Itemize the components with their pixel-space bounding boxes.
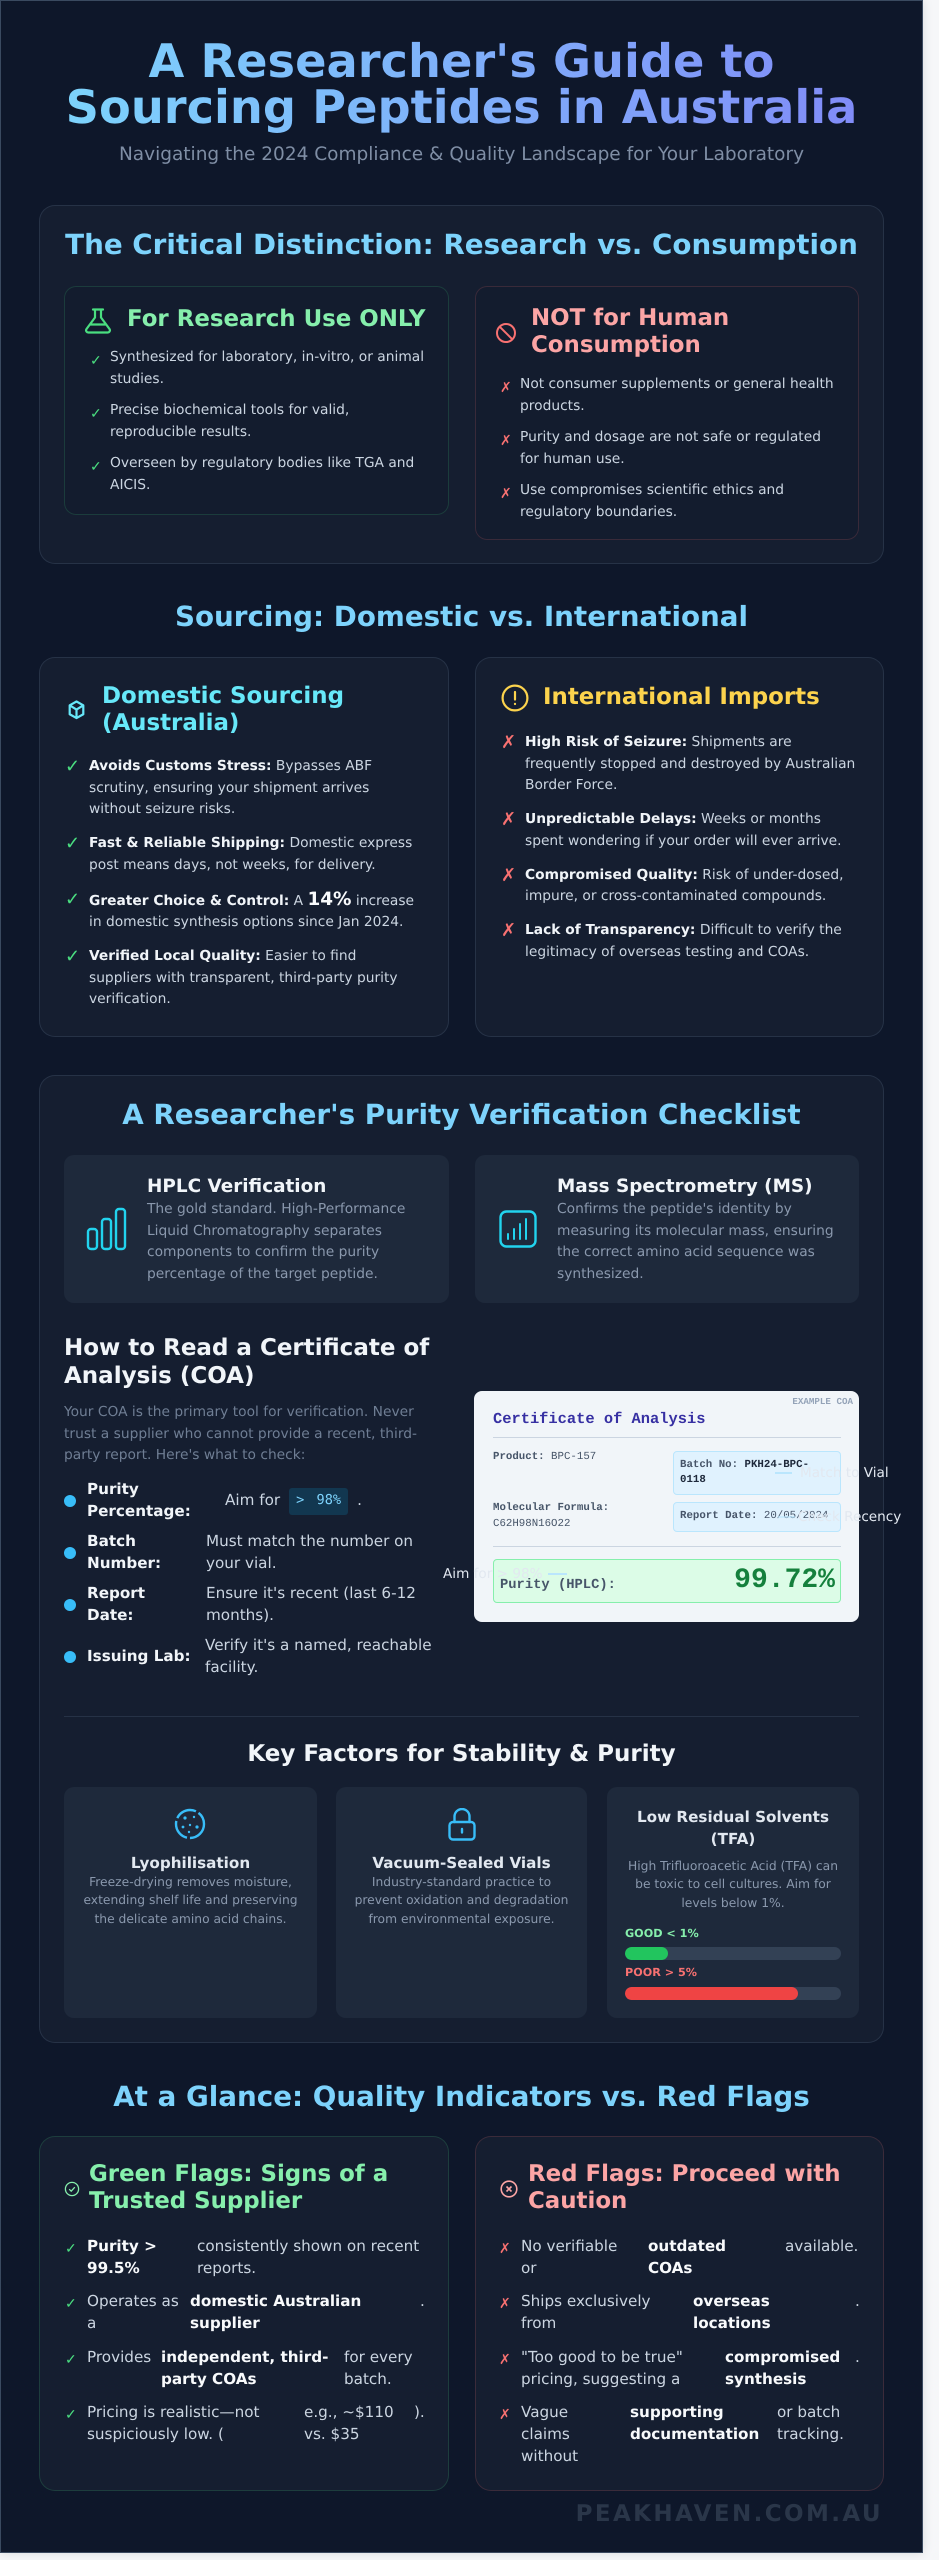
label: poor: POOR > 5%	[625, 1966, 697, 1979]
panel: domestic sourcing: ✓	[65, 833, 80, 854]
list: domestic benefits: Greater Choice & Control: A 14% increase in domestic synthesis options since Jan 2024.	[89, 889, 414, 930]
paragraph: COA intro: Your COA is the primary tool for verification. Never trust a supplier who cannot provide a recent, third-party report. Here's what to check:	[64, 1404, 417, 1463]
heading: green flags: Green Flags: Signs of a	[89, 2161, 388, 2187]
arrow: purity	[548, 1573, 567, 1574]
field: report date	[673, 1502, 841, 1532]
label: good: GOOD < 1%	[625, 1927, 699, 1940]
list: COA checks: Must match the number on your vial.	[206, 1532, 413, 1572]
list: red flags: .	[855, 2292, 860, 2310]
list: COA checks: Issuing Lab:	[87, 1647, 191, 1665]
icon: cube	[68, 700, 84, 720]
panel: green flags	[39, 2136, 449, 2491]
icon: lyophilised powder	[174, 1808, 206, 1840]
heading: not for human consumption: Consumption	[531, 332, 701, 358]
heading: how to read a COA	[64, 1335, 430, 1389]
title	[66, 34, 857, 134]
heading: vacuum-sealed vials: Vacuum-Sealed Vials	[372, 1854, 551, 1872]
list: international risks: High Risk of Seizure: Shipments are frequently stopped and destroyed by Australian Border Force.	[525, 734, 855, 793]
list: green flags: Purity >	[87, 2237, 157, 2255]
list: not for consumption points: Use compromises scientific ethics and regulatory boundaries.	[520, 482, 784, 520]
heading: key factors: Key Factors for Stability & Purity	[247, 1741, 676, 1767]
list: red flags: claims	[521, 2425, 570, 2443]
panel: international imports: ✗	[501, 732, 516, 753]
icon: spectrum	[499, 1210, 537, 1248]
icon: alert	[502, 684, 528, 712]
icon: x circle	[500, 2180, 518, 2198]
field: molecular formula: C62H98N16O22	[493, 1518, 570, 1530]
list: not for consumption points: Not consumer supplements or general health products.	[520, 376, 834, 414]
watermark: peakhaven: PEAKHAVEN.COM.AU	[576, 2501, 883, 2527]
card: vacuum-sealed vials	[336, 1787, 587, 2018]
list: international risks: Unpredictable Delays: Weeks or months spent wondering if your order will ever arrive.	[525, 811, 842, 849]
list: COA checks: > 98%	[296, 1492, 341, 1508]
heading: at a glance: At a Glance: Quality Indicators vs. Red Flags	[113, 2080, 810, 2113]
heading: for research use only: For Research Use ONLY	[127, 306, 425, 332]
list: red flags: ✗	[499, 2296, 511, 2312]
heading: red flags	[528, 2161, 841, 2214]
card: HPLC verification	[64, 1155, 449, 1303]
heading: sourcing: Sourcing: Domestic vs. International	[175, 600, 748, 633]
annotation: check recency: Check Recency	[798, 1509, 901, 1525]
list: green flags: e.g., ~$110	[304, 2403, 394, 2421]
panel: for research use only	[64, 286, 449, 515]
heading: not for human consumption	[531, 305, 729, 358]
description: HPLC: The gold standard. High-Performance Liquid Chromatography separates components to confirm the purity percentage of the target peptide.	[147, 1201, 405, 1282]
list: green flags: 99.5%	[87, 2259, 140, 2277]
list: red flags: outdated	[648, 2237, 726, 2255]
list: green flags: Pricing is realistic—not	[87, 2403, 259, 2421]
card: mass spectrometry	[475, 1155, 859, 1303]
list: red flags: compromised	[725, 2348, 840, 2366]
field: product: Product: BPC-157	[493, 1451, 596, 1463]
list: research use points: Precise biochemical tools for valid, reproducible results.	[110, 402, 349, 440]
panel: domestic sourcing: ✓	[65, 756, 80, 777]
panel: international imports: ✗	[501, 865, 516, 886]
panel: international imports	[475, 657, 884, 1037]
field: molecular formula: Molecular Formula:	[493, 1502, 609, 1514]
panel: for research use only: ✓	[90, 459, 102, 475]
purity label: Purity (HPLC):	[500, 1578, 616, 1593]
list: red flags: or	[521, 2259, 537, 2277]
panel: not for human consumption: ✗	[500, 433, 512, 449]
list: red flags	[499, 2237, 860, 2465]
list: red flags: supporting	[630, 2403, 724, 2421]
list: green flags: vs. $35	[304, 2425, 360, 2443]
list: green flags: Operates as	[87, 2292, 179, 2310]
certificate title: Certificate of Analysis	[493, 1410, 705, 1428]
arrow: batch	[775, 1472, 792, 1474]
list: red flags: .	[855, 2348, 860, 2366]
heading: how to read a COA: How to Read a Certificate of	[64, 1335, 429, 1361]
list: COA checks: Verify it's a named, reachable facility.	[205, 1636, 432, 1676]
panel: not for human consumption: ✗	[500, 486, 512, 502]
list: COA checks: Purity	[87, 1480, 139, 1498]
description: lyophilisation: Freeze-drying removes moisture, extending shelf life and preserving the delicate amino acid chains.	[83, 1875, 298, 1926]
label: example coa: EXAMPLE COA	[792, 1396, 853, 1407]
list: international risks: Compromised Quality: Risk of under-dosed, impure, or cross-contaminated compounds.	[525, 867, 844, 904]
list: green flags: party COAs	[161, 2370, 256, 2388]
list: red flags: No verifiable	[521, 2237, 617, 2255]
bar: good	[625, 1947, 841, 1960]
panel: for research use only: ✓	[90, 353, 102, 369]
heading: domestic sourcing: Domestic Sourcing	[102, 683, 344, 709]
list: red flags: synthesis	[725, 2370, 806, 2388]
list: research use points: Synthesized for laboratory, in-vitro, or animal studies.	[110, 349, 424, 387]
list: green flags: for every	[344, 2348, 413, 2366]
heading: international imports: International Imports	[543, 684, 820, 710]
icon: prohibited	[496, 323, 516, 343]
list: domestic benefits: Verified Local Quality: Easier to find suppliers with transparent, third-party purity verification.	[89, 948, 398, 1007]
heading: low residual solvents: Low Residual Solvents (TFA)	[637, 1808, 829, 1848]
list: red flags: "Too good to be true"	[521, 2348, 683, 2366]
bar: poor	[625, 1987, 841, 2000]
panel: not for human consumption	[475, 286, 859, 540]
panel: international imports: ✗	[501, 920, 516, 941]
list: green flags: batch.	[344, 2370, 392, 2388]
list: research use points: Overseen by regulatory bodies like TGA and AICIS.	[110, 455, 414, 493]
title: Sourcing Peptides in Australia	[66, 80, 857, 134]
list: green flags: supplier	[190, 2314, 260, 2332]
list: red flags: documentation	[630, 2425, 759, 2443]
list: red flags: Vague	[521, 2403, 568, 2421]
field: purity result	[493, 1559, 841, 1603]
icon: lock	[448, 1808, 476, 1841]
field: report date: Report Date: 20/05/2024	[680, 1510, 828, 1522]
list: COA checks: Batch	[87, 1532, 136, 1550]
panel: red flags	[475, 2136, 884, 2491]
list: red flags: ✗	[499, 2352, 511, 2368]
list: not for consumption points: Purity and dosage are not safe or regulated for human use.	[520, 429, 821, 467]
panel: purity verification checklist	[39, 1075, 884, 2043]
description: vacuum-sealed vials: Industry-standard practice to prevent oxidation and degradation from environmental exposure.	[355, 1875, 568, 1926]
card: low residual solvents	[607, 1787, 859, 2018]
list: green flags: suspiciously low. (	[87, 2425, 224, 2443]
list: red flags: ✗	[499, 2241, 511, 2257]
list: red flags: ✗	[499, 2407, 511, 2423]
list: red flags: from	[521, 2314, 556, 2332]
list: red flags: without	[521, 2447, 578, 2465]
list: international risks: Lack of Transparency: Difficult to verify the legitimacy of overseas testing and COAs.	[525, 922, 842, 960]
list: green flags: .	[420, 2292, 425, 2310]
list: research use points	[90, 349, 424, 493]
list: domestic benefits: Avoids Customs Stress: Bypasses ABF scrutiny, ensuring your shipment arrives without seizure risks.	[89, 758, 372, 817]
list: COA checks: Date:	[87, 1606, 134, 1624]
list: COA checks: Number:	[87, 1554, 161, 1572]
list: international risks	[501, 732, 855, 960]
subtitle: Navigating the 2024 Compliance & Quality Landscape for Your Laboratory	[119, 144, 804, 165]
icon: check circle	[64, 2182, 80, 2196]
list: green flags: independent, third-	[161, 2348, 328, 2366]
list: green flags: domestic Australian	[190, 2292, 361, 2310]
list: red flags: overseas	[693, 2292, 770, 2310]
list: red flags: available.	[785, 2237, 858, 2255]
heading: domestic sourcing	[102, 683, 344, 736]
list: green flags: a	[87, 2314, 96, 2332]
list: red flags: Ships exclusively	[521, 2292, 651, 2310]
list: COA checks: Percentage:	[87, 1502, 191, 1520]
panel: international imports: ✗	[501, 809, 516, 830]
panel: for research use only: ✓	[90, 406, 102, 422]
description: TFA: High Trifluoroacetic Acid (TFA) can be toxic to cell cultures. Aim for levels below 1%.	[628, 1859, 838, 1910]
list: COA checks: .	[357, 1491, 362, 1509]
list: red flags: COAs	[648, 2259, 692, 2277]
icon: bars	[86, 1208, 126, 1250]
icon: flask	[84, 308, 112, 334]
heading: red flags: Red Flags: Proceed with	[528, 2161, 841, 2187]
list: green flags: ✓	[65, 2407, 77, 2423]
list: COA checks: Report	[87, 1584, 145, 1602]
heading: domestic sourcing: (Australia)	[102, 710, 239, 736]
list: green flags: consistently shown on recent reports.	[197, 2237, 419, 2277]
field: batch number	[673, 1451, 841, 1495]
arrow: date	[778, 1516, 795, 1518]
panel: domestic sourcing: ✓	[65, 889, 80, 910]
field: batch number: Batch No: PKH24-BPC-0118	[680, 1458, 809, 1486]
heading: how to read a COA: Analysis (COA)	[64, 1363, 254, 1389]
list: COA checks: Ensure it's recent (last 6-12 months).	[206, 1584, 416, 1624]
list: green flags: Provides	[87, 2348, 151, 2366]
panel: critical distinction	[39, 205, 884, 564]
heading: HPLC: HPLC Verification	[147, 1176, 326, 1197]
list: green flags	[65, 2237, 425, 2443]
list: red flags: or batch	[777, 2403, 840, 2421]
heading: checklist: A Researcher's Purity Verification Checklist	[122, 1098, 801, 1131]
list: green flags: ).	[414, 2403, 425, 2421]
title: A Researcher's Guide to	[149, 34, 774, 88]
heading: critical distinction: The Critical Distinction: Research vs. Consumption	[65, 228, 858, 261]
heading: green flags: Trusted Supplier	[89, 2188, 302, 2214]
heading: not for human consumption: NOT for Human	[531, 305, 729, 331]
certificate of analysis card	[474, 1391, 859, 1622]
list: green flags: ✓	[65, 2296, 77, 2312]
list: green flags: ✓	[65, 2352, 77, 2368]
list: red flags: pricing, suggesting a	[521, 2370, 680, 2388]
list: not for consumption points	[500, 376, 834, 520]
heading: red flags: Caution	[528, 2188, 627, 2214]
list: red flags: tracking.	[777, 2425, 844, 2443]
heading: lyophilisation: Lyophilisation	[131, 1854, 250, 1872]
purity value: 99.72%	[734, 1565, 835, 1596]
annotation: match to vial: Match to Vial	[800, 1465, 889, 1481]
list: red flags: locations	[693, 2314, 771, 2332]
description: MS: Confirms the peptide's identity by measuring its molecular mass, ensuring the correct amino acid sequence was synthesized.	[557, 1201, 834, 1282]
list: COA checks: Aim for	[225, 1491, 280, 1509]
list: domestic benefits: Fast & Reliable Shipping: Domestic express post means days, not weeks, for delivery.	[89, 835, 412, 873]
field: molecular formula	[493, 1502, 609, 1530]
panel: domestic sourcing	[39, 657, 449, 1037]
heading: green flags	[89, 2161, 388, 2214]
list: green flags: ✓	[65, 2241, 77, 2257]
panel: domestic sourcing: ✓	[65, 946, 80, 967]
card: lyophilisation	[64, 1787, 317, 2018]
panel: not for human consumption: ✗	[500, 380, 512, 396]
list: COA checks	[64, 1480, 432, 1676]
heading: MS: Mass Spectrometry (MS)	[557, 1176, 813, 1197]
list: domestic benefits	[65, 756, 414, 1007]
annotation: aim for purity: Aim for > 98%	[443, 1566, 543, 1582]
